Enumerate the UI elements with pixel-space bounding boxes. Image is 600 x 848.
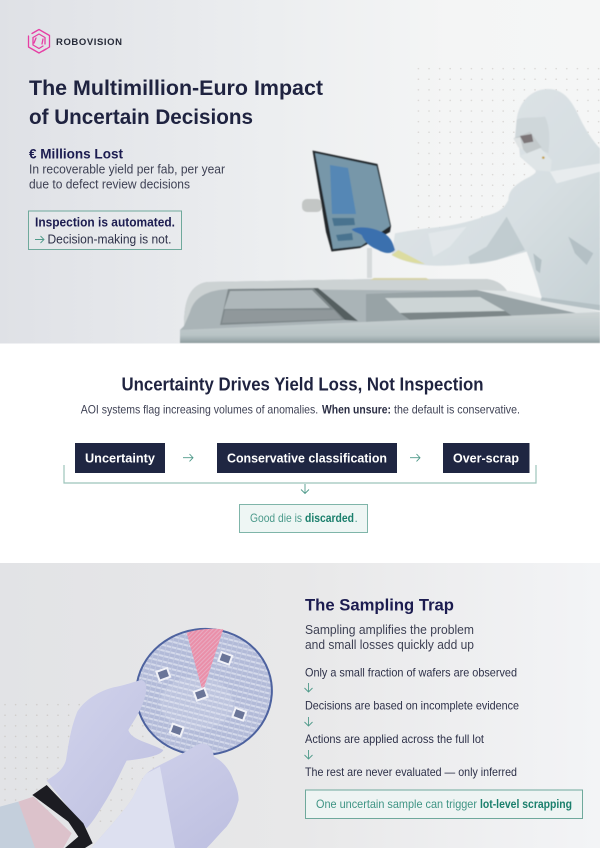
bracket — [64, 465, 536, 483]
sampling sequence: Decisions are based on incomplete evidence — [305, 698, 519, 712]
die labels — [155, 651, 248, 738]
arrow — [183, 454, 193, 461]
intro text: and small losses quickly add up — [305, 637, 474, 652]
subheading: When unsure: — [322, 402, 391, 416]
stat: millions lost: In recoverable yield per fab, per year — [29, 162, 226, 176]
heading: Uncertainty Drives Yield Loss, Not Inspection — [122, 375, 484, 395]
callout: good die discarded: Good die is — [250, 511, 302, 525]
callout: inspection — [28, 211, 182, 250]
title — [29, 77, 323, 129]
callout: lot-level scrapping — [306, 790, 582, 818]
wedge highlight — [187, 629, 223, 692]
monitor stand and knob — [302, 199, 372, 278]
brand name: ROBOVISION — [56, 37, 122, 48]
callout: lot-level scrapping: lot-level scrapping — [480, 797, 572, 811]
photo: cleanroom operator at touchscreen — [180, 89, 600, 343]
wafer behind hand — [127, 619, 281, 765]
subheading: the default is conservative. — [394, 402, 520, 416]
heading: The Sampling Trap — [305, 596, 454, 615]
step: uncertainty: Uncertainty — [85, 450, 156, 466]
intro text — [305, 622, 474, 652]
arrow — [410, 454, 420, 461]
callout: good die discarded: discarded — [305, 511, 354, 525]
panel: uncertainty drives yield loss — [0, 344, 600, 563]
left glove — [47, 680, 163, 828]
callout: good die discarded: . — [354, 511, 358, 525]
step: uncertainty — [75, 443, 165, 473]
blue glove — [352, 227, 395, 253]
logo — [28, 30, 122, 53]
title: of Uncertain Decisions — [29, 106, 253, 129]
panel: hero — [0, 0, 600, 344]
callout: lot-level scrapping: One uncertain sample can trigger — [316, 797, 477, 811]
panel: sampling trap — [0, 563, 600, 848]
subheading: AOI systems flag increasing volumes of anomalies. — [81, 402, 318, 416]
stat: millions lost: due to defect review decisions — [29, 176, 190, 191]
callout: good die discarded — [240, 504, 368, 532]
step: over-scrap — [443, 443, 530, 473]
right glove — [92, 744, 239, 848]
callout: inspection: Decision-making is not. — [48, 232, 172, 246]
step: conservative classification: Conservative classification — [227, 450, 387, 466]
callout: inspection: Inspection is automated. — [35, 216, 175, 230]
step: conservative classification — [217, 443, 397, 473]
machine — [180, 278, 600, 343]
title: The Multimillion-Euro Impact — [29, 77, 323, 100]
subheading — [81, 402, 520, 416]
stat: millions lost — [29, 146, 226, 191]
stat: millions lost: € Millions Lost — [29, 146, 123, 162]
photo: gloved hands holding wafer — [0, 619, 281, 848]
sampling sequence — [304, 666, 519, 779]
sampling sequence: The rest are never evaluated — only inferred — [305, 765, 517, 779]
step: over-scrap: Over-scrap — [453, 450, 519, 466]
sampling sequence: Only a small fraction of wafers are observed — [305, 666, 517, 680]
intro text: Sampling amplifies the problem — [305, 622, 474, 637]
watch band — [32, 785, 93, 848]
touchscreen monitor — [312, 150, 391, 252]
arrow down — [301, 484, 309, 494]
icon: hexagon logo — [28, 30, 50, 53]
operator suit — [352, 89, 600, 311]
sleeve and wrist — [0, 797, 72, 848]
sampling sequence: Actions are applied across the full lot — [305, 732, 485, 746]
